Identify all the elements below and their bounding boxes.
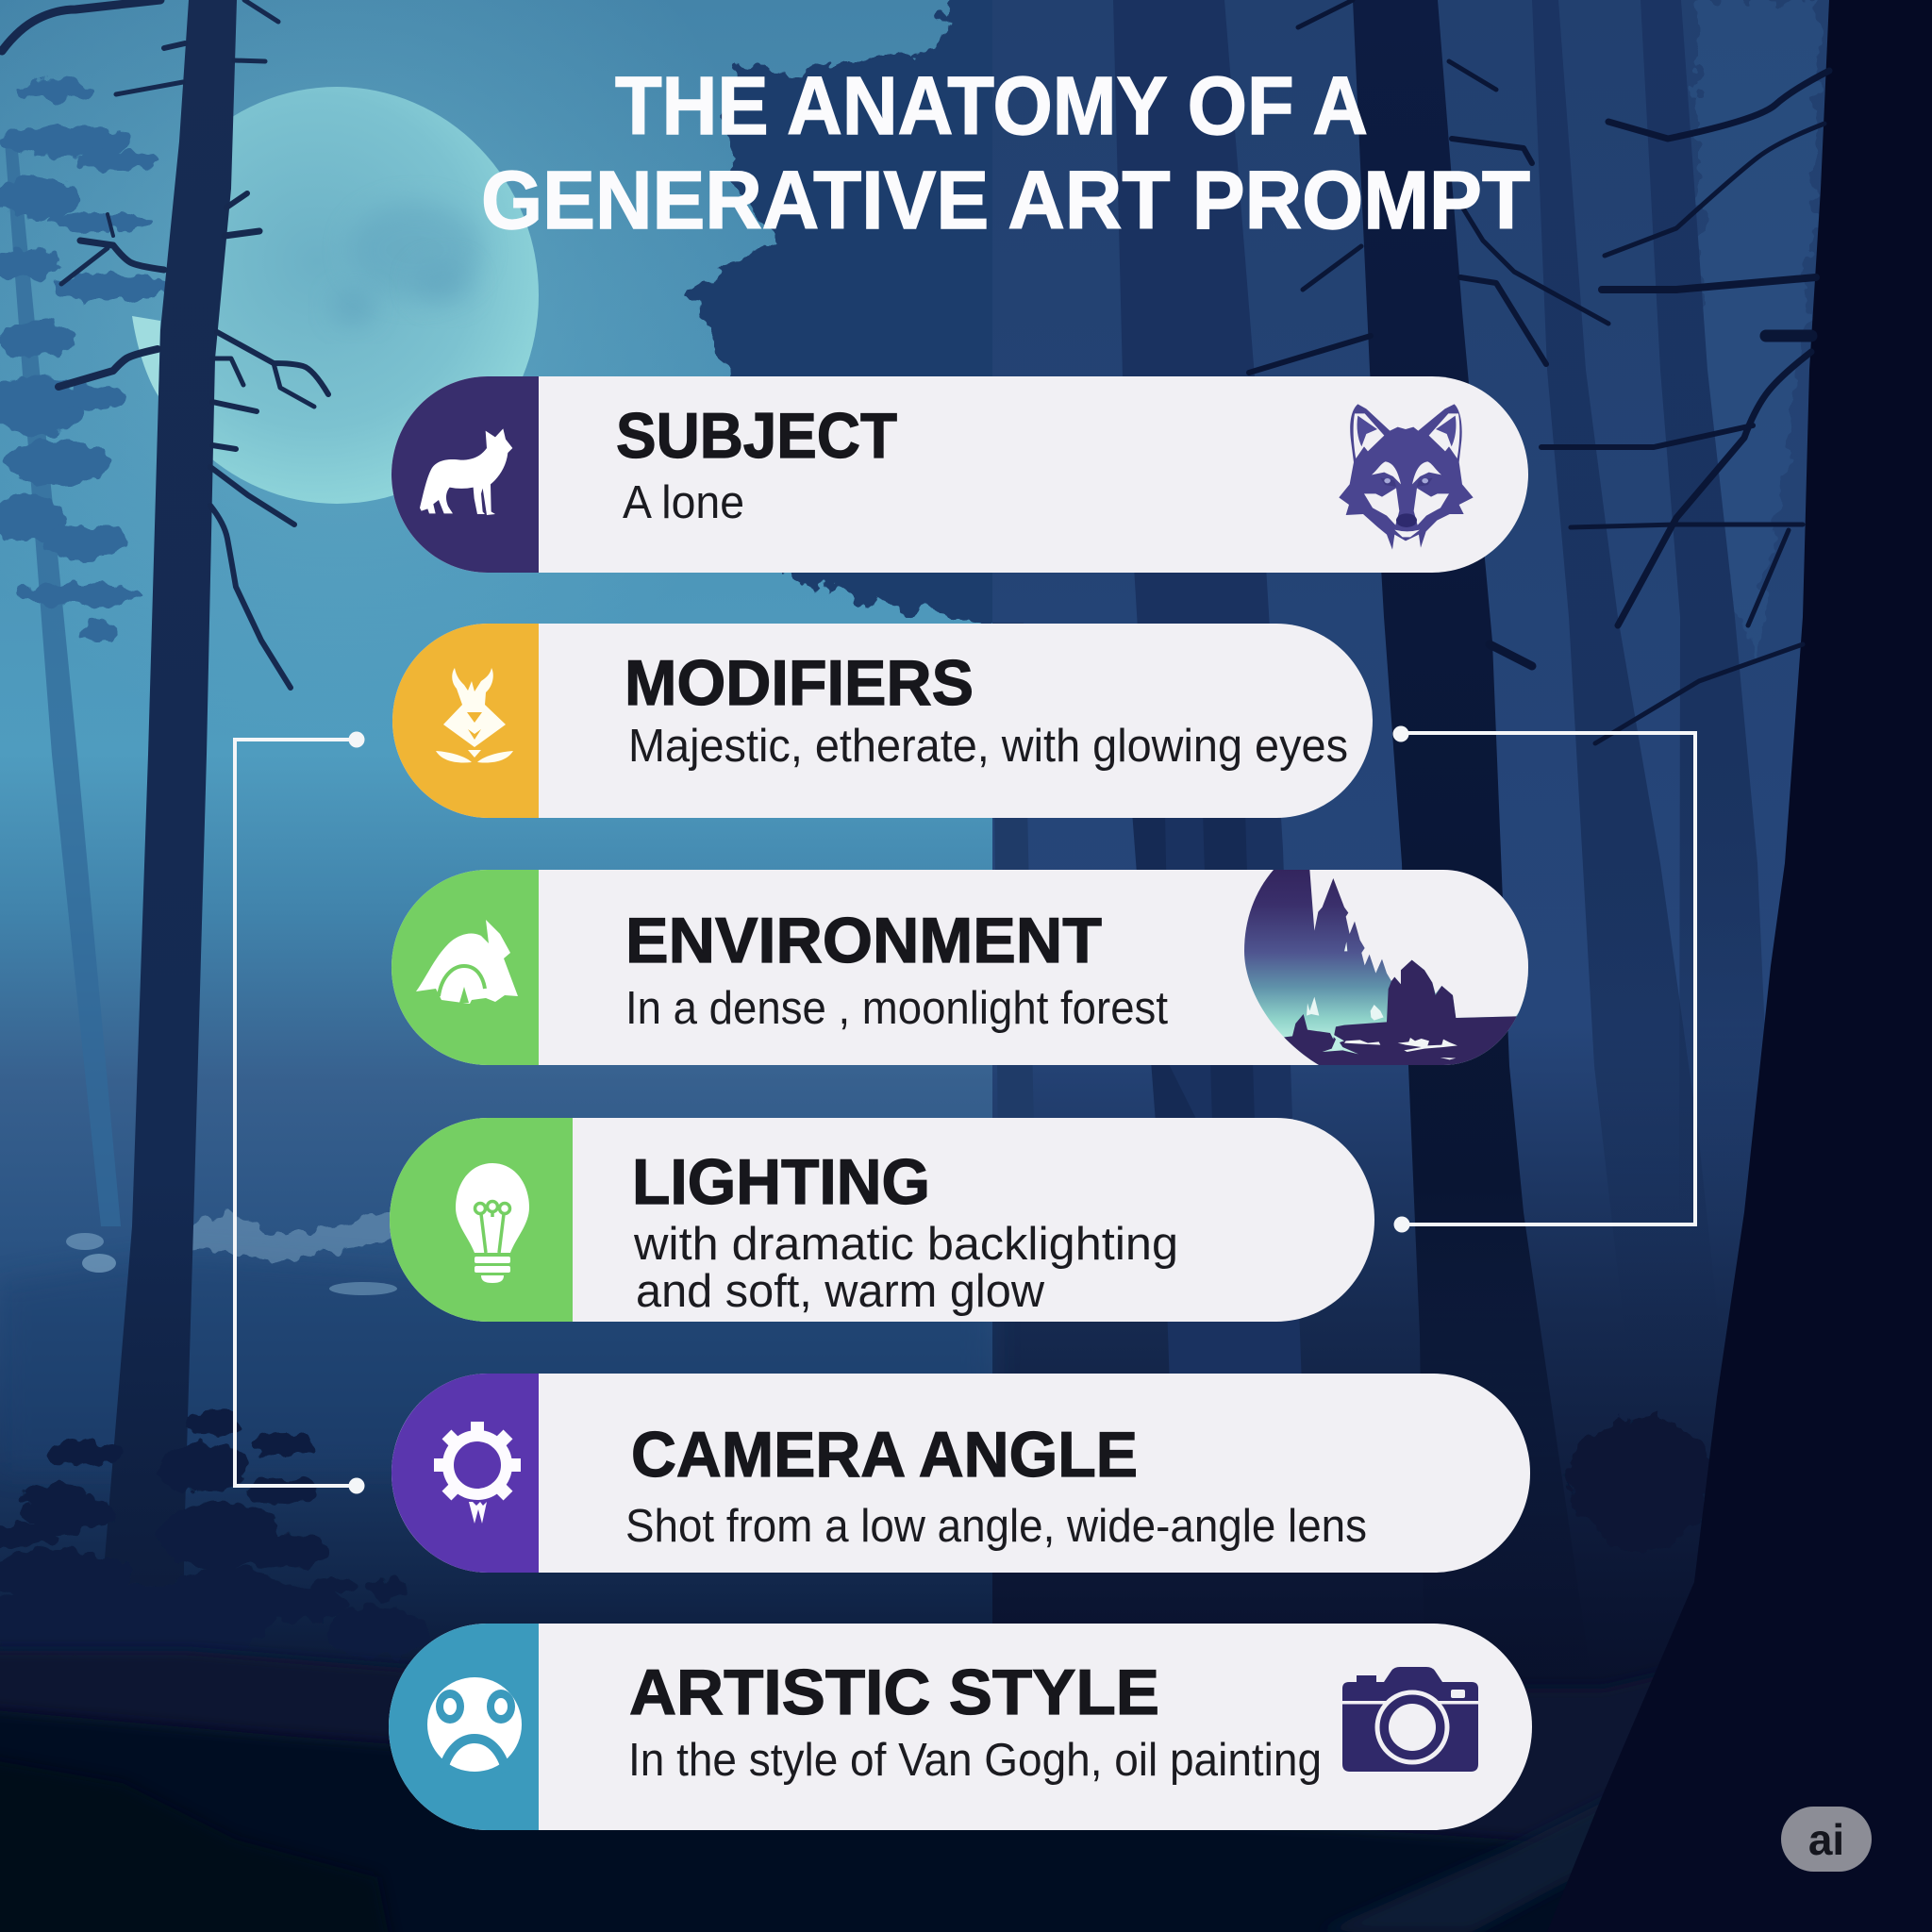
icon: antlered spirit	[436, 668, 513, 762]
badge: ai watermark: ai	[1808, 1815, 1844, 1864]
description: with dramatic backlighting	[633, 1219, 1178, 1270]
right mid trunk	[1353, 0, 1594, 1698]
misty ground patches	[0, 1206, 992, 1472]
left undergrowth	[0, 1410, 429, 1660]
title: GENERATIVE ART PROMPT	[481, 155, 1530, 246]
right foreground tree	[1547, 0, 1932, 1932]
heading: ENVIRONMENT	[625, 905, 1102, 976]
centre foliage mass and dark forest panel	[690, 0, 1932, 1932]
panel: camera angle	[391, 1374, 1530, 1573]
title	[481, 60, 1530, 246]
panel: lighting	[390, 1118, 1374, 1322]
panel: modifiers	[392, 624, 1373, 818]
icon: rocky mound	[416, 920, 518, 1004]
far left pine foliage	[0, 78, 175, 643]
description: A lone	[623, 477, 744, 528]
icon: howling wolf silhouette	[420, 428, 512, 515]
moon glow	[0, 0, 780, 748]
connector: modifiers to camera angle	[235, 732, 364, 1494]
badge: ai watermark	[1781, 1807, 1872, 1872]
heading: LIGHTING	[632, 1146, 930, 1218]
far left pine trunk	[5, 142, 121, 1226]
icon: sad face	[427, 1677, 522, 1772]
panel: environment	[391, 863, 1538, 1071]
icon: light bulb	[456, 1163, 529, 1283]
heading: MODIFIERS	[625, 647, 974, 719]
heading: SUBJECT	[616, 400, 897, 472]
description: In a dense , moonlight forest	[625, 983, 1168, 1034]
icon: camera	[1342, 1667, 1478, 1772]
title: THE ANATOMY OF A	[615, 60, 1368, 152]
forest floor	[0, 1415, 1932, 1932]
background trunks	[992, 0, 1774, 1396]
heading: ARTISTIC STYLE	[629, 1657, 1159, 1728]
connector: modifiers to lighting	[1392, 726, 1695, 1232]
description: In the style of Van Gogh, oil painting	[628, 1735, 1322, 1786]
icon: gear	[434, 1422, 521, 1524]
panel: artistic style	[389, 1624, 1532, 1830]
panel: subject	[391, 376, 1528, 573]
full moon	[132, 87, 539, 504]
description: and soft, warm glow	[636, 1266, 1045, 1317]
bare branches on the right	[1249, 0, 1829, 743]
description: Shot from a low angle, wide-angle lens	[625, 1501, 1367, 1552]
description	[633, 1219, 1178, 1317]
heading: CAMERA ANGLE	[631, 1419, 1138, 1491]
icon: wolf head	[1339, 404, 1474, 550]
main left tree	[2, 0, 328, 1679]
icon: moonlit landscape vignette	[1244, 870, 1528, 1065]
description: Majestic, etherate, with glowing eyes	[628, 721, 1348, 772]
